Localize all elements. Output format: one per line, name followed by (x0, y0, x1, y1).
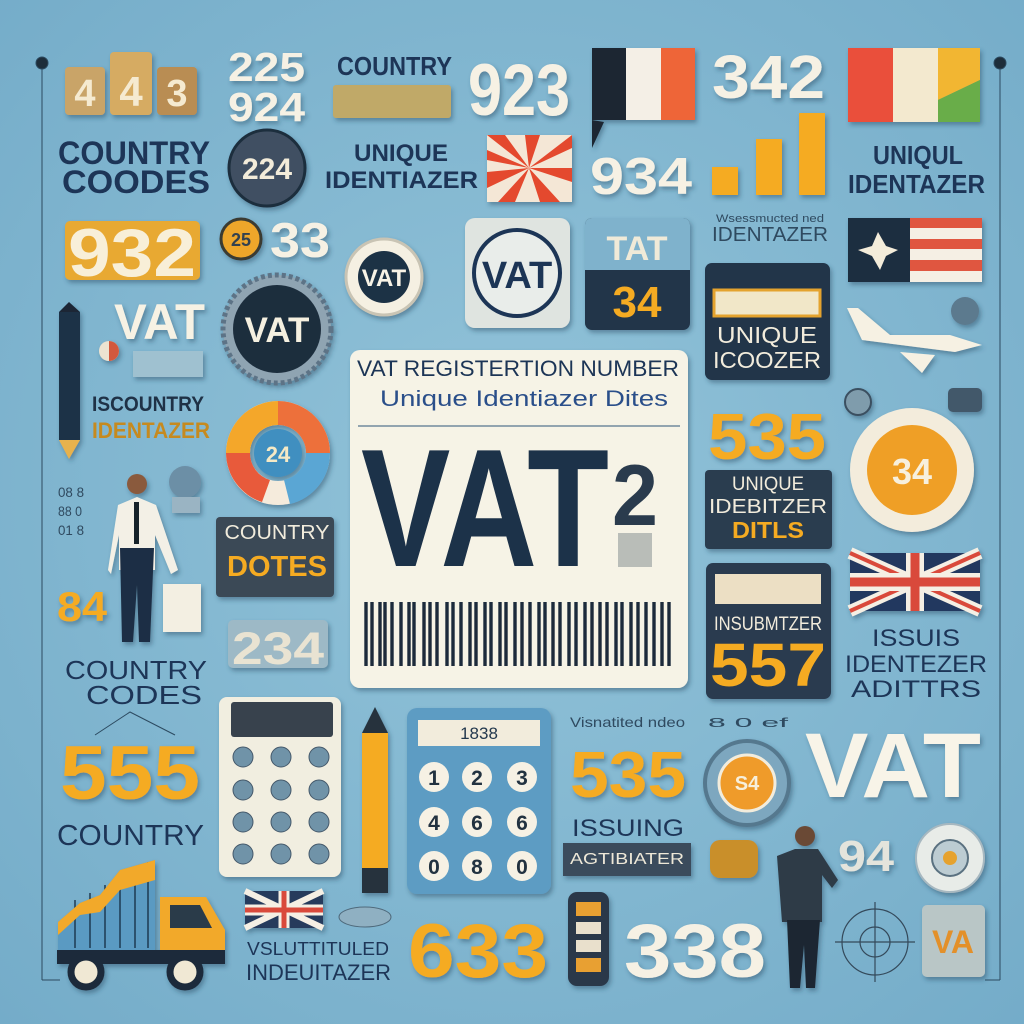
text: unique identazer: IDENTIAZER (325, 167, 478, 194)
card: big VAT: VAT (361, 414, 609, 602)
badge: 224 (229, 130, 305, 206)
tile: insubmer 557: INSUBMTZER (714, 614, 822, 635)
numbers: 225 924: 924 (228, 84, 305, 130)
heading: country codes (58, 135, 210, 200)
tile: unique icoozer: ICOOZER (713, 347, 821, 373)
tile: 234: 234 (232, 623, 324, 674)
card rule (358, 425, 680, 427)
tiles: 443: 4 (74, 73, 96, 115)
icon: calculator blue: 1 (428, 767, 440, 790)
heading: country codes: COUNTRY (58, 135, 210, 171)
badge: 34 (850, 408, 974, 532)
chart: donut: 24 (266, 442, 291, 467)
text: country codes lower (65, 655, 207, 710)
badge: 224: 224 (242, 153, 292, 186)
text: issuis identezer aditrs: IDENTEZER (845, 651, 987, 678)
badge and number: 33 (221, 214, 330, 268)
card title: VAT REGISTERTION NUMBER (357, 356, 679, 381)
text: sluttiled induitazer (246, 939, 391, 985)
text: country identazer: IDENTAZER (92, 418, 210, 443)
icon: calculator blue: 0 (516, 856, 528, 879)
badge and number: 33: 33 (270, 214, 330, 268)
text: issuis identezer aditrs (845, 625, 987, 703)
number: 338: 338 (624, 909, 766, 994)
flag: tricolor (592, 48, 695, 148)
card: smudge (618, 533, 652, 567)
tiles: 443 (65, 52, 197, 115)
small text: icons row: 8 0 ef (708, 715, 789, 730)
text: sluttiled induitazer: VSLUTTITULED (247, 939, 389, 959)
badge: VAT circle (346, 239, 422, 315)
tile: 932: 932 (68, 215, 196, 291)
heading: country codes: COODES (62, 164, 210, 200)
icon: calculator blue: 4 (428, 812, 440, 835)
tile: country: COUNTRY (337, 51, 452, 81)
small text block: list: 88 0 (58, 503, 82, 519)
small text: header: Visnatited ndeo (570, 714, 685, 730)
coins (710, 840, 758, 878)
tiles: 443: 3 (166, 73, 188, 115)
tile: country (333, 51, 452, 118)
text: uniqul identazer: UNIQUL (873, 140, 963, 170)
icon: truck (57, 860, 225, 987)
tiles: 443: 4 (119, 68, 143, 115)
text: identazer small: IDENTAZER (712, 224, 828, 246)
icon: calculator blue: 0 (428, 856, 440, 879)
text: country codes lower: COUNTRY (65, 655, 207, 685)
text: sluttiled induitazer: INDEUITAZER (246, 960, 391, 985)
tile: 535 unique identizer: 535 (708, 400, 826, 473)
text: country codes lower: CODES (86, 680, 202, 710)
numbers: 225 924 (228, 44, 305, 130)
number: 633: 633 (408, 909, 548, 994)
icon: calculator white (219, 697, 341, 877)
tile: unique icoozer (705, 263, 830, 380)
icon: orange pencil (362, 707, 388, 893)
tile: country dotes: COUNTRY (224, 522, 330, 544)
icon: target (916, 824, 984, 892)
flag: small union (245, 891, 323, 928)
text: unique identazer (325, 140, 478, 194)
small icon: stack (169, 466, 201, 513)
icon: calculator blue: 8 (471, 856, 483, 879)
icon: calculator blue: 1838 (460, 724, 498, 743)
text: VAT big: VAT (805, 715, 981, 817)
numbers: 225 924: 225 (228, 44, 305, 90)
tile: country dotes: DOTES (227, 551, 327, 583)
icon: small oval (339, 907, 391, 927)
text: issuis identezer aditrs: ADITTRS (851, 676, 981, 703)
card: big 2: 2 (612, 448, 658, 544)
badge: VAT gear (223, 275, 331, 383)
decorative bracket (95, 712, 175, 735)
badge: 34: 34 (892, 451, 932, 492)
number: 342: 342 (712, 43, 825, 111)
chart: donut (226, 401, 330, 504)
tile: 535 unique identizer: IDEBITZER (709, 496, 827, 518)
number: 934: 934 (590, 148, 692, 206)
icon: pencil (59, 302, 80, 459)
text: country: COUNTRY (57, 820, 204, 852)
tile: TAT 34 (585, 218, 690, 330)
tile: 535 unique identizer: UNIQUE (732, 474, 804, 495)
flag: sunburst (487, 135, 572, 202)
tile: TAT 34: TAT (606, 230, 668, 268)
icon: calculator blue: 6 (516, 812, 528, 835)
card title: Unique Identiazer Dites (380, 386, 668, 411)
tile: insubmer 557 (706, 563, 831, 699)
text: issuis identezer aditrs: ISSUIS (872, 625, 960, 652)
text: unique identazer: UNIQUE (354, 140, 448, 167)
badge and number: 33: 25 (231, 230, 251, 250)
tile: TAT 34: 34 (613, 278, 662, 327)
icon: calculator blue (407, 708, 551, 894)
icon: crosshair (835, 902, 915, 982)
icon: calculator blue: 6 (471, 812, 483, 835)
text: uniqul identazer (848, 140, 985, 199)
text: country identazer: ISCOUNTRY (92, 393, 204, 416)
text: uniqul identazer: IDENTAZER (848, 169, 985, 199)
text: identazer small: Wsessmucted ned (716, 213, 824, 225)
text: identazer small (712, 213, 828, 246)
flag: stripes and star (848, 218, 982, 282)
tile: issuing agtibiater: ISSUING (572, 815, 684, 842)
tile: issuing agtibiater: AGTIBIATER (570, 851, 684, 868)
small icon: dots (99, 341, 203, 377)
icon: person left (108, 474, 201, 642)
icon: calculator blue: 2 (471, 767, 483, 790)
badge: VAT circle: VAT (362, 265, 407, 292)
barcode (366, 602, 669, 666)
badge: 84 gear: S4 (735, 773, 760, 795)
tile: VA orange (922, 905, 985, 977)
tile: insubmer 557: 557 (710, 631, 826, 699)
badge: 84 gear (705, 741, 789, 825)
number: 535 lower: 535 (570, 738, 686, 811)
text: VAT: VAT (114, 294, 205, 350)
tile: country dotes (216, 517, 334, 597)
icon: calculator blue: 3 (516, 767, 528, 790)
tile: issuing agtibiater (563, 815, 691, 876)
number: 923: 923 (468, 50, 570, 131)
tile: 535 unique identizer: DITLS (732, 517, 804, 543)
main card (350, 350, 688, 688)
icon: phone (568, 892, 609, 986)
tile: 535 unique identizer (705, 400, 832, 549)
number: 84: 84 (57, 583, 108, 630)
tile: unique icoozer: UNIQUE (717, 322, 817, 348)
icon: plane (847, 308, 982, 373)
bar chart (712, 113, 825, 195)
badge: VAT gear: VAT (245, 311, 309, 350)
card title (357, 356, 679, 411)
flag: union (850, 553, 980, 611)
small text block: list (58, 484, 84, 538)
small text block: list: 01 8 (58, 522, 84, 538)
icons: small row (845, 297, 982, 415)
tile: VA orange: VA (932, 924, 974, 960)
tile: VAT (465, 218, 570, 328)
small text block: list: 08 8 (58, 484, 84, 500)
number: 94: 94 (838, 832, 895, 881)
text: country identazer (92, 393, 210, 443)
flag: red white green (848, 48, 980, 122)
number: 555: 555 (60, 731, 200, 816)
icon: person right (777, 826, 838, 988)
tile: VAT: VAT (482, 255, 552, 297)
